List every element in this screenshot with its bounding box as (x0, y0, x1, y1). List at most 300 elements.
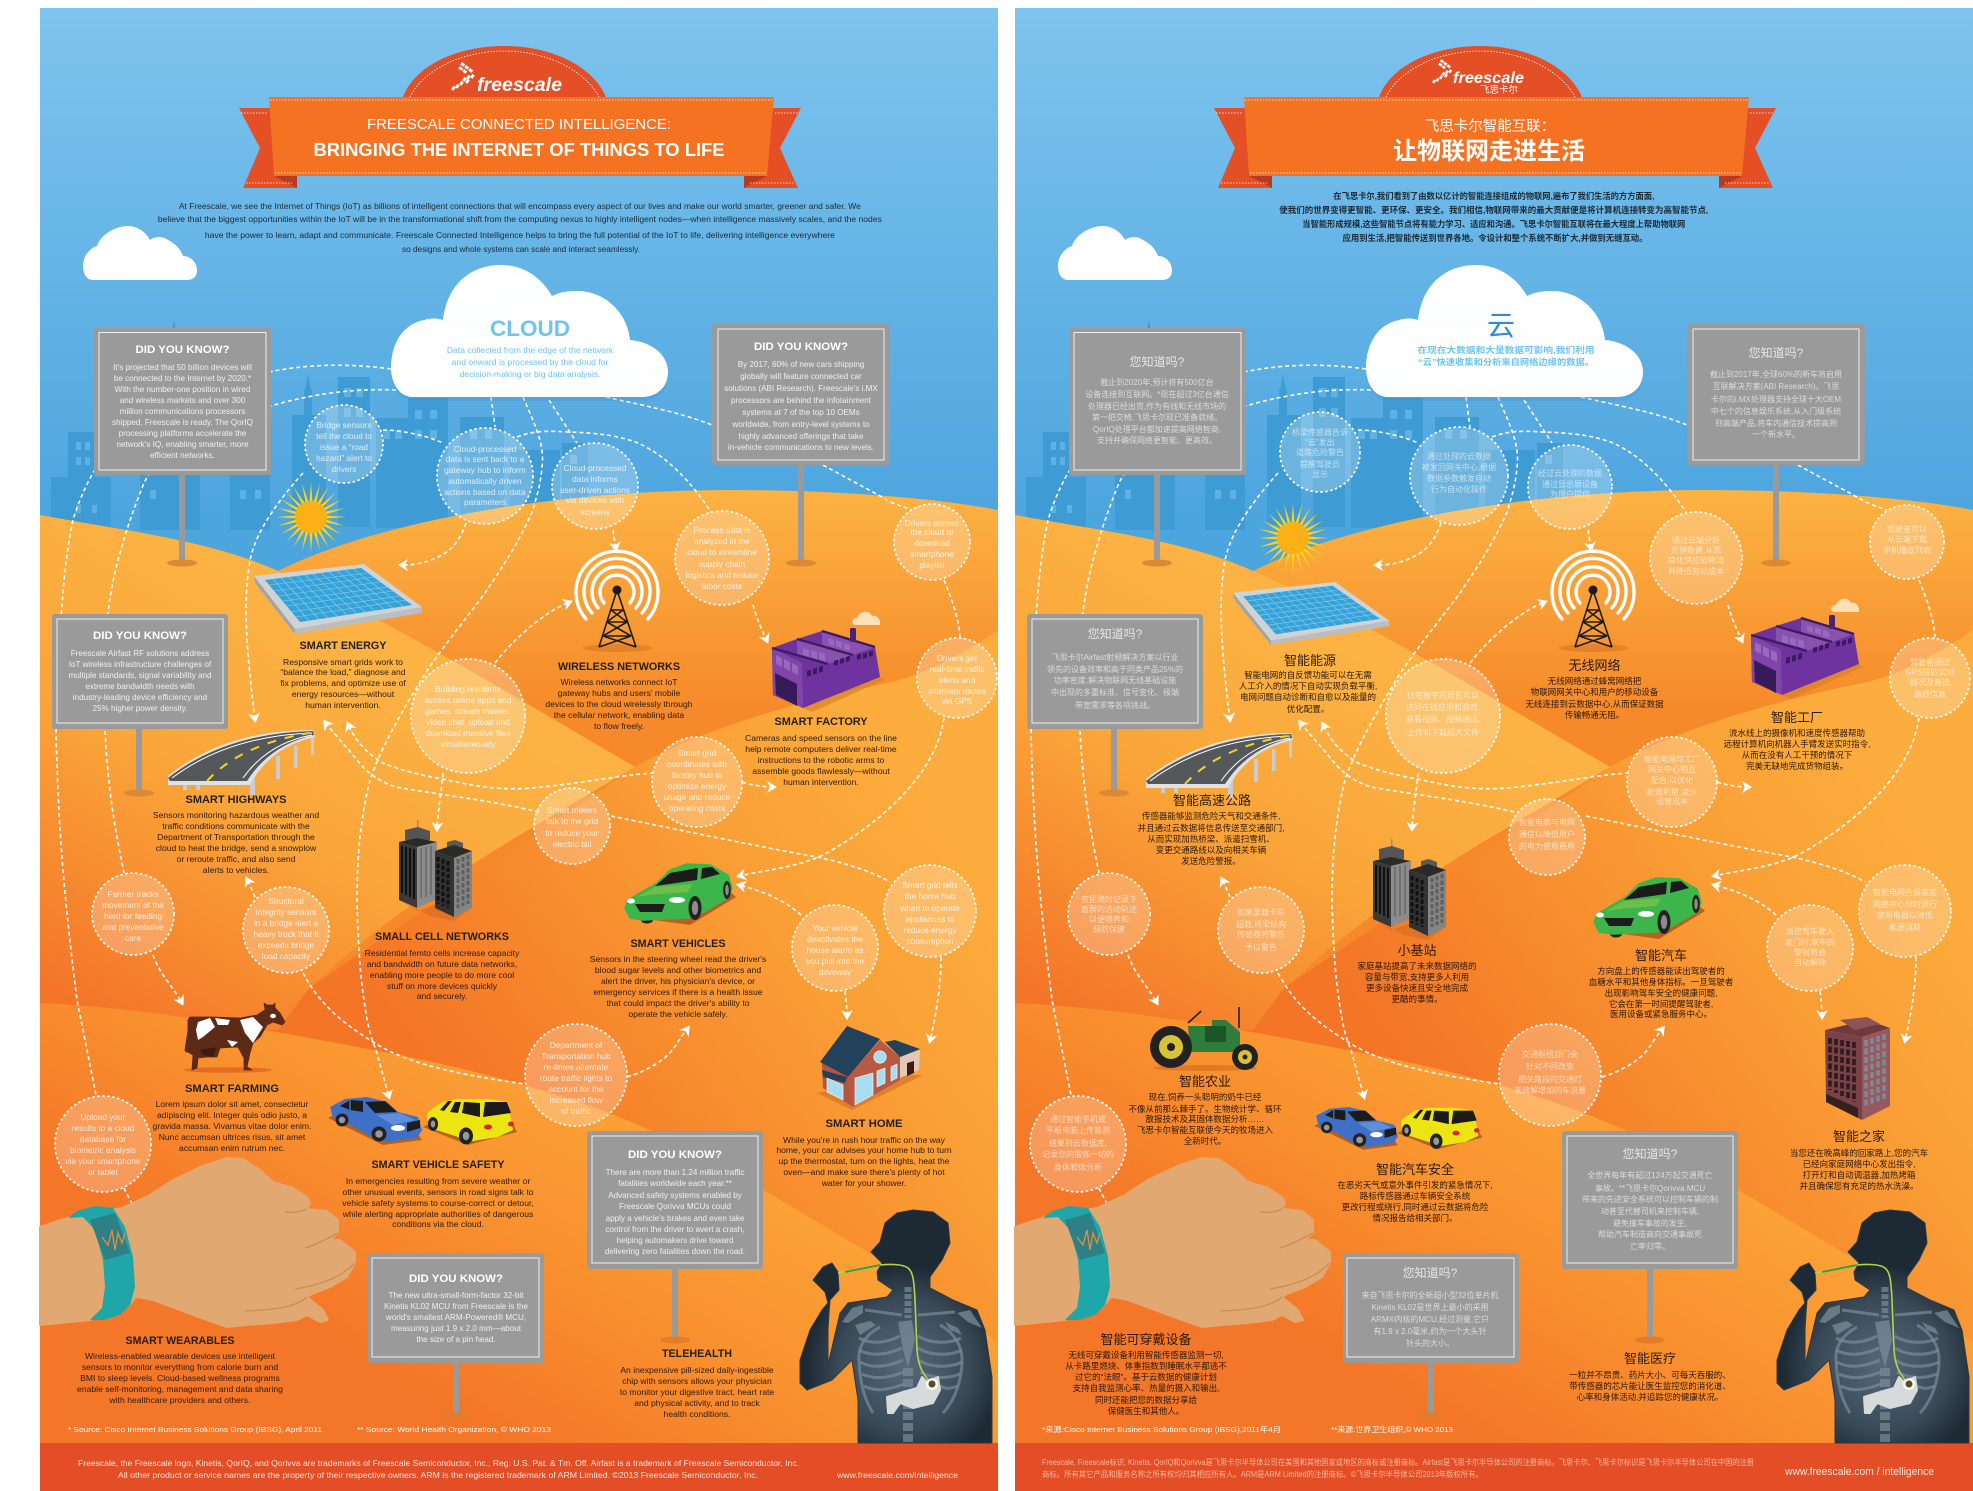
sign: did you know 3: multiple standards, signal variability and (68, 671, 212, 680)
section: 小基站: 家庭基站提高了未来数据网络的 (1357, 961, 1477, 971)
panel: Chinese infographic (1015, 8, 1973, 1491)
callout circles: 桥梁传感器告诉 (1292, 427, 1348, 437)
section: smart home: home, your car advises your home hub to turn (776, 1145, 952, 1155)
sign: did you know 1: shipped, Freescale is ready. The QorIQ (112, 418, 253, 427)
sign: 您知道吗 1 (1069, 328, 1246, 566)
callout circles: 访问在线应用和游戏, (1406, 702, 1480, 712)
sign: did you know 1: It's projected that 50 billion devices will (113, 363, 252, 372)
sign: 您知道吗 3: 您知道吗? (1088, 626, 1143, 641)
section: 智能汽车: 它会在第一时间提醒驾驶者, (1609, 999, 1713, 1009)
section: wireless networks: WIRELESS NETWORKS (558, 661, 680, 673)
sign: did you know 1: million communications processors (120, 407, 245, 416)
section: smart wearables: with healthcare providers and others. (109, 1395, 250, 1405)
callout circles: user-driven actions (560, 485, 630, 495)
cloud (391, 265, 668, 401)
icon: x-ray person (800, 1210, 992, 1443)
section: 智能农业: 全新时代。 (1184, 1136, 1226, 1146)
sign: 您知道吗 3: 领先的设备效率和高于同类产品25%的 (1047, 664, 1183, 674)
section: smart farming: Nunc accumsan ultrices risus, sit amet (159, 1132, 306, 1142)
footer legal text: Freescale, Freescale标识, Kinetis, QorIQ和Qorivva是飞思卡尔半导体公司在美国和其他国家或地区的商标或注册商标。Airfast是飞思卡尔半导体公司的注册商标。飞思卡尔、飞思卡尔标识是飞思卡尔半导体公司在中国的注册 (1042, 1457, 1754, 1467)
sign: did you know 3: 25% higher power density. (93, 704, 187, 713)
section: 智能农业 (1128, 1074, 1282, 1146)
callout circles: 为用户提供 (1550, 489, 1590, 499)
callout circles: GPS获取实时 (1906, 667, 1954, 677)
callout circles: 传感器将警告 (1237, 929, 1285, 939)
source notes (68, 1425, 551, 1434)
section: 智能汽车安全: 路标传感器通过车辆安全系统 (1360, 1191, 1471, 1201)
callout circles: you pull into the (806, 956, 864, 966)
callout circles: video chat, upload and (426, 717, 510, 727)
callout circles: 以便喂养和 (1089, 914, 1129, 924)
section: smart highways: Sensors monitoring hazardous weather and (153, 810, 319, 820)
sign: did you know 2: worldwide, from entry-level systems to (731, 420, 870, 429)
footer legal text: 商标。所有其它产品和服务名称之所有权均归其相应所有人。ARM是ARM Limited的注册商标。©飞思卡尔半导体公司2013年版权所有。 (1042, 1469, 1483, 1479)
section: 智能高速公路: 发送危险警报。 (1181, 856, 1241, 866)
section: smart highways: Department of Transportation through the (157, 832, 315, 842)
sign: did you know 2: processors are behind the infotainment (731, 396, 872, 405)
section: 智能之家: 当您还在晚高峰的回家路上,您的汽车 (1790, 1148, 1928, 1158)
section: smart energy: fix problems, and optimize use of (280, 678, 406, 688)
section: 智能高速公路: 从而实现加热桥梁、派遣扫雪机、 (1147, 834, 1275, 844)
callout circles: screens (580, 507, 610, 517)
callout circles: factory hub to (672, 770, 723, 780)
sign: 您知道吗 2 (1687, 323, 1865, 566)
footer legal text: Freescale, the Freescale logo, Kinetis, QorIQ, and Qorivva are trademarks of Freescale Semiconductor, Inc., Reg. U.S. Pat. & Tm. Off. Airfast is a trademark of Freescale Semiconductor, Inc. (78, 1459, 799, 1468)
sign: 您知道吗 4: 帮助汽车制造商向交通事故死 (1598, 1229, 1702, 1239)
section: 智能能源: 优化配置。 (1287, 704, 1329, 714)
callout circles: route traffic lights to (540, 1073, 613, 1083)
section: 智能医疗: 智能医疗 (1624, 1351, 1676, 1366)
footer legal text: www.freescale.com / intelligence (1784, 1466, 1934, 1478)
callout circles: parameters (464, 497, 506, 507)
section: 智能可穿戴设备: 过它的“法眼”。基于云数据的健康计划 (1075, 1372, 1217, 1382)
section: smart highways: cloud to heat the bridge, send a snowplow (156, 843, 317, 853)
callout circles: via GPS (942, 696, 973, 706)
section: 智能农业: 不像从前那么棘手了。生物统计学、循环 (1128, 1104, 1282, 1114)
cloud: decision-making or big data analysis. (460, 369, 600, 379)
section: small cell networks (365, 931, 520, 1001)
sign: 您知道吗 4: 带来的先进安全系统可以控制车辆的制 (1582, 1194, 1718, 1204)
sign: did you know 1: With the number-one position in wired (115, 385, 250, 394)
sign: did you know 4: control from the driver to avert a crash, (606, 1225, 744, 1234)
callout circles: house alarm as (807, 945, 863, 955)
callout circles: the cloud to (911, 527, 954, 537)
callout circles: Transportation hub (541, 1051, 611, 1061)
sign: did you know 1: efficient networks. (150, 451, 215, 460)
icon: highway bridge (1146, 733, 1293, 798)
sign: did you know 4: delivering zero fatalities down the road. (605, 1247, 745, 1256)
callout circles: Structural (268, 896, 304, 906)
sign: 您知道吗 5: 有1.9 x 2.0毫米,约为一个大头针 (1374, 1326, 1486, 1336)
sign: 您知道吗 5: 您知道吗? (1403, 1265, 1458, 1280)
section: smart factory: Cameras and speed sensors on the line (745, 733, 897, 743)
section: smart vehicles: alert the driver, his physician's device, or (601, 976, 755, 986)
section: smart energy: human intervention. (305, 700, 381, 710)
callout circles: 预防保健 (1093, 924, 1125, 934)
sign: 您知道吗 1: 处理器已经出货,作为有线和无线市场的 (1088, 401, 1226, 411)
icon: tractor (1150, 1007, 1258, 1071)
sign: 您知道吗 4: 动甚至代替司机来控制车辆, (1601, 1206, 1699, 1216)
section: 智能之家: 并且确保您有充足的热水洗澡。 (1799, 1181, 1919, 1191)
section: smart factory: assemble goods flawlessly—without (752, 766, 890, 776)
callout circles: 被发回网关中心,根据 (1422, 462, 1496, 472)
section: 智能可穿戴设备: 智能可穿戴设备 (1100, 1332, 1192, 1347)
section: 智能工厂: 完美无缺地完成货物组装。 (1746, 761, 1848, 771)
sun icon (1258, 503, 1328, 573)
callout circles: 住宅楼宇的居民可以 (1407, 690, 1479, 700)
callout circles: drivers (332, 464, 356, 474)
callout circles: exceeds bridge (258, 940, 315, 950)
section: 智能医疗: 心率和身体活动,并追踪您的健康状况。 (1577, 1392, 1723, 1402)
callout circles: 手机播放列表 (1883, 545, 1931, 555)
sign: did you know 4 (587, 1131, 763, 1344)
section: 智能农业: 飞思卡尔智能互联使今天的牧场进入 (1137, 1125, 1273, 1135)
callout circles: 提醒驾驶员 (1300, 459, 1340, 469)
section: 智能农业: 散报技术及其固体数据分析…… (1145, 1114, 1265, 1124)
cloud (1366, 265, 1643, 401)
callout circles: gateway hub to inform (444, 465, 526, 475)
callout circles: hazard” alert to (316, 453, 372, 463)
callout circles: optimize energy (668, 781, 727, 791)
section: 智能汽车: 智能汽车 (1635, 948, 1687, 963)
section: smart farming (153, 1083, 311, 1153)
callout circles: tell the cloud to (316, 431, 372, 441)
sign: 您知道吗 1: 第一把交椅,飞思卡尔现已准备就绪。 (1092, 412, 1222, 422)
sign: 您知道吗 1: 截止到2020年,预计将有500亿台 (1100, 377, 1214, 387)
sign: 您知道吗 3 (1027, 614, 1203, 796)
section: 智能能源: 电网问题自动诊断和自愈以及能量的 (1240, 692, 1376, 702)
callout circles: Bridge sensors (316, 420, 372, 430)
callout circles: 数据参数触发自动 (1427, 473, 1491, 483)
callout circles: of traffic (561, 1106, 591, 1116)
section: smart wearables: SMART WEARABLES (126, 1335, 234, 1347)
section: 智能汽车: 出现影响驾车安全的健康问题, (1605, 988, 1717, 998)
section: smart vehicle safety: other unusual events, sensors in road signs talk to (342, 1187, 534, 1197)
section: 无线网络 (1525, 658, 1664, 720)
section: smart energy: energy resources—without (292, 689, 395, 699)
section: 智能农业: 现在,饲养一头聪明的奶牛已经 (1149, 1092, 1262, 1102)
callout circles: load capacity (262, 951, 311, 961)
callout circles: 农民随时记录下 (1081, 894, 1137, 904)
section: smart home: oven—and make sure there's plenty of hot (783, 1167, 945, 1177)
intro paragraph: have the power to learn, adapt and communicate. Freescale Connected Intelligence helps to bring the full potential of the IoT to life, delivering intelligence everywhere (205, 231, 835, 240)
section: smart vehicle safety: while alerting appropriate authorities of dangerous (342, 1209, 533, 1219)
section: small cell networks: SMALL CELL NETWORKS (375, 931, 509, 943)
callout circles: 运营成本 (1656, 796, 1688, 806)
callout circles: 通过处理的云数据 (1427, 451, 1491, 461)
callout circles: 家门时,家中的 (1785, 937, 1835, 947)
sign: did you know 5: world's smallest ARM-Powered® MCU, (385, 1313, 526, 1322)
section: smart vehicles: SMART VEHICLES (630, 938, 726, 950)
section: smart energy: Responsive smart grids work to (283, 657, 403, 667)
section: 智能可穿戴设备: 同时还能把您的数据分享给 (1095, 1395, 1197, 1405)
section: smart highways (153, 794, 319, 875)
section: telehealth (620, 1348, 774, 1419)
section: 无线网络: 无线连接到云数据中心,从而保证数据 (1525, 699, 1664, 709)
callout circles: 自动解除 (1794, 957, 1826, 967)
section: smart vehicles: blood sugar levels and other biometrics and (595, 965, 761, 975)
section: 智能能源: 智能能源 (1284, 653, 1336, 668)
callout circles: operating costs (669, 803, 725, 813)
callout circles: download (914, 538, 950, 548)
callout circles: 智能电网告诉家庭 (1873, 887, 1937, 897)
section: telehealth: health conditions. (664, 1409, 730, 1419)
section: 智能农业: 智能农业 (1179, 1074, 1231, 1089)
sign: 您知道吗 5: Kinetis KL02是世界上最小的采用 (1372, 1302, 1488, 1312)
section: smart energy: “balance the load,” diagnose and (280, 667, 406, 677)
freescale logo dome (1379, 46, 1582, 97)
decorative small cloud (83, 226, 197, 280)
section: wireless networks: devices to the cloud wirelessly through (545, 699, 693, 709)
callout circles: talk to the grid (546, 816, 598, 826)
callout circles: 针对不同改变 (1526, 1061, 1574, 1071)
section: small cell networks: stuff on more devices quickly (387, 981, 498, 991)
callout circles: 上传和下载超大文件 (1407, 727, 1479, 737)
section: 无线网络: 无线网络 (1568, 658, 1621, 673)
callout circles: logistics and reduce (685, 570, 759, 580)
callout circles: Drivers access (905, 518, 959, 528)
callout circles: Smart grid (678, 748, 717, 758)
sign: did you know 3: industry-leading device efficiency and (73, 693, 207, 702)
sign: 您知道吗 4: 避免撞车事故的发生, (1613, 1218, 1687, 1228)
callout circles: 通过智能手机或 (1050, 1114, 1106, 1124)
source notes: *来源:Cisco Internet Business Solutions Group (IBSG),2011年4月 (1042, 1424, 1281, 1434)
sign: 您知道吗 3: 带宽需求等各项挑战。 (1075, 700, 1155, 710)
icon: wireless tower (1552, 551, 1634, 652)
section: small cell networks: and bandwidth on future data networks, (367, 959, 517, 969)
section: smart energy (280, 640, 406, 710)
callout circles: appliances to (906, 914, 955, 924)
sign: 您知道吗 1: QorIQ处理平台都加速提高网络智商, (1093, 424, 1221, 434)
callout circles: automatically driven (448, 476, 522, 486)
sign: did you know 5: DID YOU KNOW? (409, 1273, 503, 1285)
icon: city buildings (399, 820, 472, 921)
freescale logo dome: freescale (477, 75, 562, 96)
callout circles: 来疏解增加的车流量 (1514, 1085, 1586, 1095)
section: smart wearables: sensors to monitor everything from calorie burn and (82, 1362, 278, 1372)
callout circles (1030, 412, 1970, 1192)
panel: English infographic (40, 8, 998, 1491)
callout circles: 结果到云数据库, (1049, 1138, 1107, 1148)
section: smart farming: accumsan enim rutrum nec. (179, 1143, 285, 1153)
intro paragraph: believe that the biggest opportunities within the IoT will be in the transformational shift from the computing nexus to highly intelligent nodes—when intelligence massively scales, and the nodes (158, 215, 882, 224)
sign: did you know 1: be connected to the Internet by 2020.* (114, 374, 252, 383)
callout circles: 能源消耗 (1889, 922, 1921, 932)
callout circles: 道路危险警告 (1296, 447, 1344, 457)
section: 智能工厂: 从而在没有人工干预的情况下 (1742, 750, 1853, 760)
callout circles: playlist (919, 560, 945, 570)
callout circles: 当您驾车驶入 (1786, 926, 1834, 936)
callout circles: Upload your (81, 1112, 126, 1122)
sign: 您知道吗 2: 到高端产品,将车内通信技术提高到 (1715, 418, 1837, 428)
sign: 您知道吗 4: 全世界每年有超过124万起交通死亡 (1587, 1170, 1713, 1180)
source notes: **来源:世界卫生组织,© WHO 2013 (1331, 1424, 1453, 1434)
section: smart vehicles: emergency services if there is a health issue (593, 987, 763, 997)
section: 智能汽车 (1589, 948, 1734, 1019)
sign: did you know 1: and wireless markets and over 300 (120, 396, 246, 405)
section: telehealth: chip with sensors allows your physician (622, 1376, 772, 1386)
callout circles: labor costs (702, 581, 742, 591)
sign: 您知道吗 5 (1343, 1253, 1519, 1420)
section: small cell networks: enabling more people to do more cool (370, 970, 514, 980)
callout circles: actions based on data (444, 487, 526, 497)
callout circles: 如果重载卡车 (1237, 907, 1285, 917)
section: 智能医疗 (1569, 1351, 1731, 1402)
section: smart factory: SMART FACTORY (774, 716, 868, 728)
section: smart farming: SMART FARMING (185, 1083, 279, 1095)
section: smart highways: alerts to vehicles. (203, 865, 269, 875)
sign: did you know 1: DID YOU KNOW? (136, 344, 230, 356)
sign: did you know 4: There are more than 1.24 million traffic (606, 1168, 744, 1177)
sign: did you know 3 (52, 614, 228, 796)
cloud: Data collected from the edge of the network (447, 345, 614, 355)
section: 无线网络: 无线网络通过蜂窝网络把 (1548, 676, 1642, 686)
callout circles: to reduce your (545, 828, 599, 838)
section: 智能高速公路: 并且通过云数据将信息传送至交通部门, (1138, 823, 1284, 833)
callout circles: consumption (906, 936, 954, 946)
sign: did you know 1 (94, 328, 271, 566)
sign: 您知道吗 2: 互联解决方案(ABI Research)。飞思 (1713, 381, 1839, 391)
section: 无线网络: 传输畅通无阻。 (1565, 710, 1624, 720)
callout circles: electric bill (553, 839, 592, 849)
callout circles: analyzed in the (694, 536, 750, 546)
sign: 您知道吗 2: 卡尔的i.MX处理器支持全球十大OEM (1711, 394, 1841, 404)
sign: did you know 3: IoT wireless infrastructure challenges of (69, 660, 212, 669)
section: smart factory: help remote computers deliver real-time (745, 744, 897, 754)
callout circles: 观看视频、视频通话, (1406, 714, 1480, 724)
section: wireless networks (545, 661, 693, 731)
section: smart vehicles: Sensors in the steering wheel read the driver's (590, 954, 766, 964)
callout circles: database for (80, 1134, 126, 1144)
title banner: BRINGING THE INTERNET OF THINGS TO LIFE (314, 140, 724, 160)
callout circles: driveway (819, 967, 852, 977)
callout circles: 驾驶者通过 (1910, 657, 1950, 667)
callout circles: reduce energy (903, 925, 957, 935)
intro paragraph: 在飞思卡尔,我们看到了由数以亿计的智能连接组成的物联网,遍布了我们生活的方方面面, (1333, 190, 1654, 201)
title banner: 飞思卡尔智能互联： (1425, 118, 1555, 135)
callout circles: results to a cloud (72, 1123, 135, 1133)
sign: 您知道吗 5: ARM®内核的MCU,经过测量,它只 (1371, 1314, 1489, 1324)
section: telehealth: TELEHEALTH (662, 1348, 732, 1360)
callout circles: in a bridge alert a (254, 918, 318, 928)
icon: hand with wristband (40, 1158, 355, 1327)
callout circles: Cloud-processed (454, 444, 517, 454)
section: 智能之家: 智能之家 (1833, 1129, 1885, 1144)
section: smart highways: or reroute traffic, and also send (177, 854, 296, 864)
section: 小基站: 更酷的事情。 (1391, 994, 1443, 1004)
section: wireless networks: to flow freely. (594, 721, 644, 731)
callout circles: cloud to streamline (687, 547, 757, 557)
section: 智能可穿戴设备: 保健医生和其他人。 (1108, 1406, 1184, 1416)
section: smart factory: human intervention. (783, 777, 859, 787)
section: smart vehicle safety: vehicle safety systems to course-correct or detour, (342, 1198, 534, 1208)
section: 智能可穿戴设备 (1065, 1332, 1227, 1416)
callout circles: 配合,以优化 (1651, 775, 1693, 785)
cloud: and onward is processed by the cloud for (452, 357, 608, 367)
callout circles: supply chain (699, 559, 745, 569)
callout circles: 经过云处理的数据 (1538, 468, 1602, 478)
sign: did you know 5: the size of a pin head. (416, 1335, 496, 1344)
section: 智能之家: 打开灯和自动调温器,加热烤箱 (1803, 1170, 1916, 1180)
section: 智能可穿戴设备: 从卡路里燃烧、体重指数到睡眠水平都逃不 (1065, 1361, 1227, 1371)
callout circles: care (125, 933, 141, 943)
callout circles: movement of the (102, 900, 164, 910)
callout circles: via devices with (566, 495, 624, 505)
cloud: “云”快速收集和分析来自网络边缘的数据。 (1418, 357, 1594, 367)
icon: green car (1594, 878, 1705, 939)
section: wireless networks: gateway hubs and users' mobile (558, 688, 680, 698)
callout circles: 记录您的锻炼一切的 (1042, 1149, 1114, 1159)
callout circles: download massive files (425, 728, 511, 738)
section: smart vehicle safety: conditions via the cloud. (392, 1219, 484, 1229)
section: smart home: up the thermostat, turn on the lights, heat the (778, 1156, 950, 1166)
section: smart home: water for your shower. (821, 1178, 906, 1188)
callout circles: Process data is (694, 525, 750, 535)
section: smart wearables (77, 1335, 283, 1405)
sign: did you know 4: Advanced safety systems enabled by (608, 1191, 743, 1200)
sign: 您知道吗 3: 功率密度,解决物联网无线基础设施 (1054, 675, 1176, 685)
footer legal text (78, 1459, 959, 1480)
section: 智能汽车安全: 情况报告给相关部门。 (1372, 1213, 1458, 1223)
sign: did you know 3: extreme bandwidth needs with (85, 682, 195, 691)
footer legal text: www.freescale.com/intelligence (836, 1471, 959, 1480)
callout circles: 网关中心相互 (1648, 764, 1696, 774)
section: 智能汽车安全: 智能汽车安全 (1376, 1162, 1454, 1177)
callout circles: “云”发出 (1305, 437, 1335, 447)
section: 智能工厂: 远程计算机向机器人手臂发送实时指令, (1724, 739, 1870, 749)
sign: 您知道吗 2: 一个新水平。 (1752, 429, 1800, 439)
callout circles: usage and reduce (664, 792, 731, 802)
callout circles (55, 405, 997, 1192)
callout circles: or tablet (88, 1167, 119, 1177)
icon: apartment building (1825, 1017, 1890, 1120)
cloud: 在现在大数据和大量数据可影响,我们利用 (1418, 345, 1594, 355)
icon: solar panel (1233, 582, 1389, 645)
sign: did you know 4: DID YOU KNOW? (628, 1149, 722, 1161)
freescale logo dome (403, 46, 606, 97)
dashed connection paths (1031, 365, 1935, 1236)
callout circles: alerts and (939, 675, 976, 685)
section: 小基站: 小基站 (1397, 943, 1437, 958)
callout circles: simultaneously (441, 739, 496, 749)
sign: 您知道吗 1: 支持并确保网络更智能、更高效。 (1097, 435, 1217, 445)
callout circles: 智能电表与电网 (1519, 817, 1575, 827)
sign: did you know 3: Freescale Airfast RF solutions address (71, 649, 209, 658)
section: smart home (776, 1118, 952, 1188)
callout circles: 通信以降低用户 (1519, 829, 1575, 839)
icon: solar panel (254, 564, 422, 634)
icon: factory (1751, 599, 1863, 699)
sign: did you know 5 (368, 1253, 544, 1420)
section: smart farming: adipiscing elit. Integer quis odio justo, a (157, 1110, 307, 1120)
callout circles: via your smartphone (65, 1156, 141, 1166)
decorative small cloud (1058, 226, 1172, 280)
section: 智能可穿戴设备: 支持自我监测心率、热量的摄入和输出, (1073, 1383, 1219, 1393)
callout circles: access online apps and (425, 695, 512, 705)
section: wireless networks: the cellular network, enabling data (554, 710, 684, 720)
callout circles: account for the (549, 1084, 604, 1094)
section: 无线网络: 物联网网关中心和用户的移动设备 (1531, 687, 1659, 697)
sign: did you know 2: in-vehicle communications to new levels. (728, 443, 874, 452)
sign: did you know 2: globally will feature connected car (740, 372, 862, 381)
sign: 您知道吗 4: 亡率归零。 (1630, 1241, 1670, 1251)
section: telehealth: and physical activity, and to track (634, 1398, 760, 1408)
sign: 您知道吗 4: 您知道吗? (1623, 1146, 1678, 1161)
callout circles: 的电力使用费用 (1519, 841, 1575, 851)
title banner (239, 97, 801, 188)
callout circles: 警报将会 (1794, 947, 1826, 957)
section: smart factory (745, 716, 897, 787)
